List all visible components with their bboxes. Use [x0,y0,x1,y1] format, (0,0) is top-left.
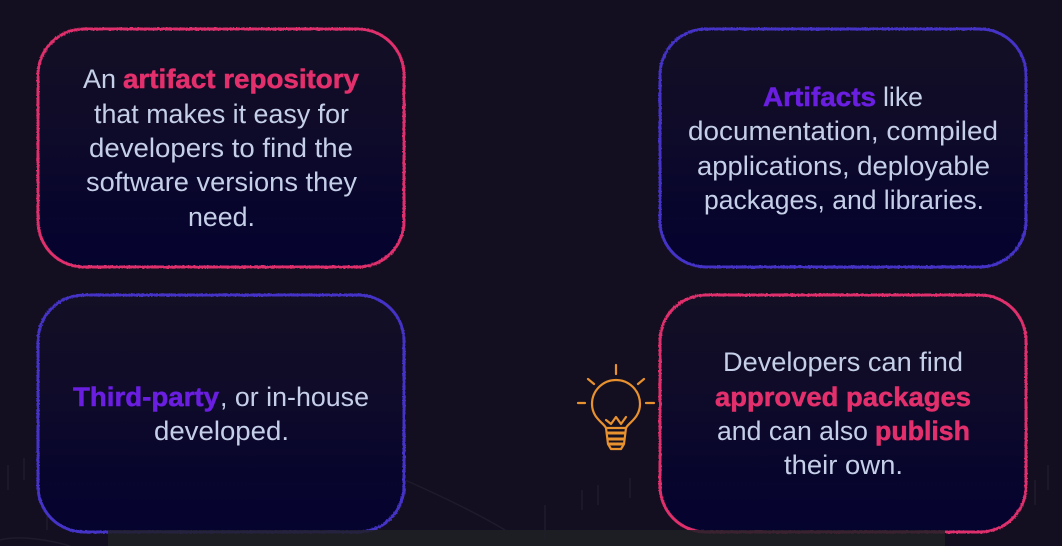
text: approved packages description: approved packages [715,382,971,412]
panel: artifacts [660,29,1026,267]
text: artifacts description: documentation, compiled [688,116,998,146]
text: artifacts description: like [883,82,923,112]
text: artifact repository description: artifact repository [123,64,359,94]
bottom bar [108,530,945,546]
text: approved packages description: Developers can find [723,347,963,377]
text: artifacts description [688,82,998,215]
text: artifact repository description: developers to find the [89,133,353,163]
panel: artifact repository [38,29,404,267]
text: artifact repository description: that makes it easy for [94,99,349,129]
panel: approved packages [660,295,1026,532]
text: artifact repository description: An [83,64,116,94]
text: third-party description: , or in-house [220,382,369,412]
text: third-party description [73,382,369,446]
text: artifacts description: Artifacts [763,82,876,112]
icon: light bulb [578,365,654,449]
text: artifact repository description: software versions they [86,167,357,197]
panel: third-party [38,295,404,532]
text: approved packages description: publish [875,416,970,446]
text: third-party description: Third-party [73,382,219,412]
text: artifact repository description: need. [188,202,255,232]
text: approved packages description: their own. [784,450,903,480]
text: artifacts description: applications, deployable [697,151,990,181]
text: approved packages description: and can also [717,416,868,446]
text: third-party description: developed. [154,416,289,446]
text: artifacts description: packages, and libraries. [704,185,984,215]
text: artifact repository description [83,64,359,232]
text: approved packages description [715,347,971,480]
